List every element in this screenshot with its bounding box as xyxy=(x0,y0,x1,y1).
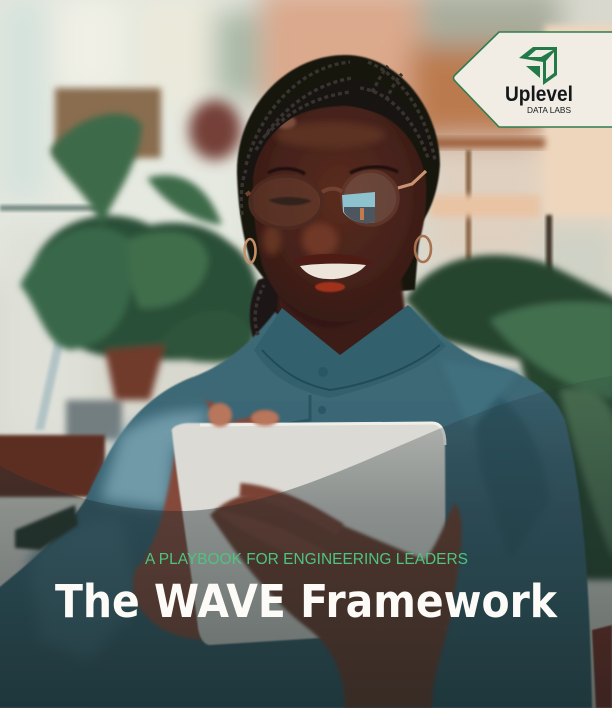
person: hair back xyxy=(237,55,440,300)
person: eyebrows and mouth xyxy=(268,167,398,292)
eyebrow subtitle: A PLAYBOOK FOR ENGINEERING LEADERS xyxy=(145,551,468,568)
person: shirt xyxy=(0,305,592,708)
logo tag xyxy=(454,32,612,127)
person: earrings xyxy=(244,236,431,263)
logo wordmark: Uplevel xyxy=(505,83,573,106)
left plant xyxy=(20,114,262,400)
title: The WAVE Framework xyxy=(55,575,558,628)
person: glasses xyxy=(246,171,426,228)
logo icon: green cube arrow xyxy=(519,47,557,85)
translucent dark curved overlay xyxy=(0,376,612,708)
logo subtitle: DATA LABS xyxy=(527,105,571,115)
person: face xyxy=(253,106,426,328)
logo tag shape xyxy=(454,32,612,127)
person: forehead hair line xyxy=(240,80,438,190)
right plant xyxy=(405,255,612,580)
person: braids texture xyxy=(241,62,435,335)
person: lower braid xyxy=(250,270,290,345)
tablet and hands xyxy=(133,400,462,708)
person: neck xyxy=(275,270,408,372)
bottom right sliver and table objects xyxy=(15,505,612,708)
